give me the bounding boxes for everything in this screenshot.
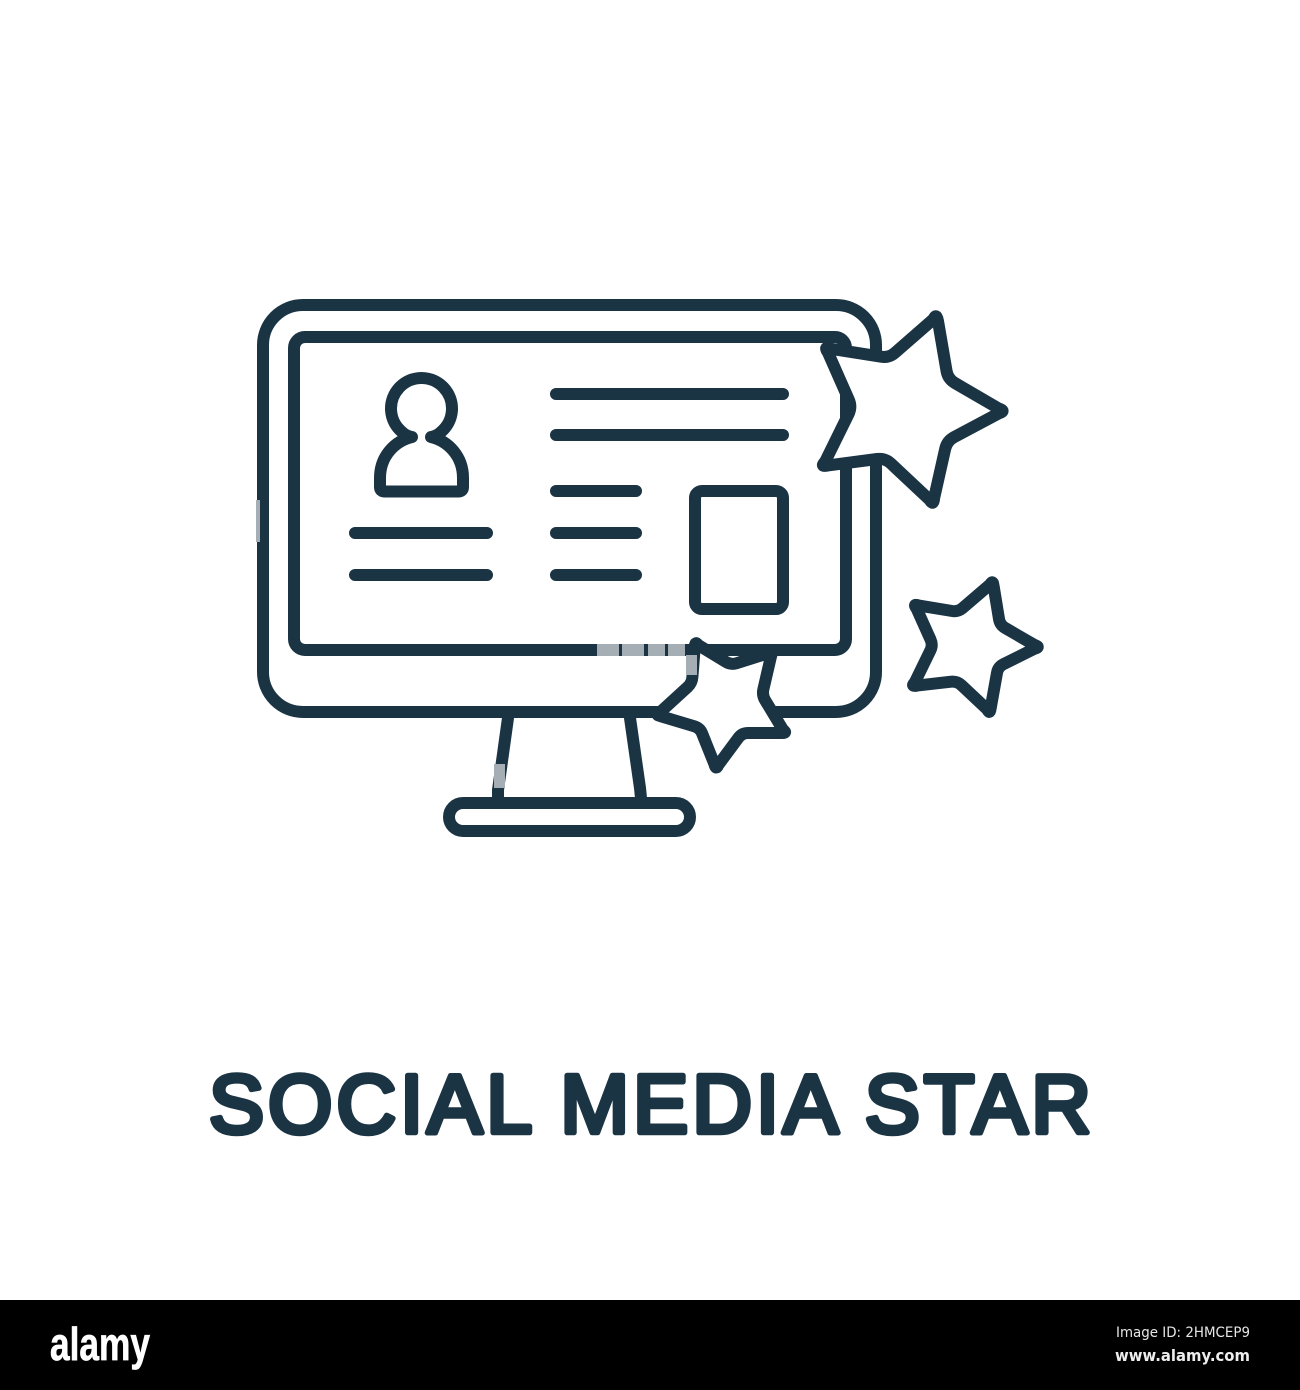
monitor frame xyxy=(263,305,876,712)
content headline lines xyxy=(556,394,783,435)
footer logo: alamy xyxy=(50,1318,150,1370)
icon: large star xyxy=(823,316,1003,503)
icon: user profile xyxy=(380,378,463,492)
icon: right star xyxy=(913,582,1038,712)
watermark remnants xyxy=(256,500,697,788)
profile text lines xyxy=(355,533,487,575)
title: SOCIAL MEDIA STAR xyxy=(209,1058,1091,1150)
monitor screen xyxy=(294,337,846,650)
icon: monitor with profile and stars xyxy=(263,305,1038,831)
footer bar xyxy=(0,1300,1300,1390)
content body lines xyxy=(556,491,636,575)
monitor stand xyxy=(498,718,641,798)
icon: bottom star xyxy=(657,643,785,768)
image id: Image ID: 2HMCEP9 xyxy=(1116,1325,1250,1341)
monitor base xyxy=(449,803,690,831)
website: www.alamy.com xyxy=(1115,1346,1250,1365)
content image placeholder xyxy=(695,491,783,609)
